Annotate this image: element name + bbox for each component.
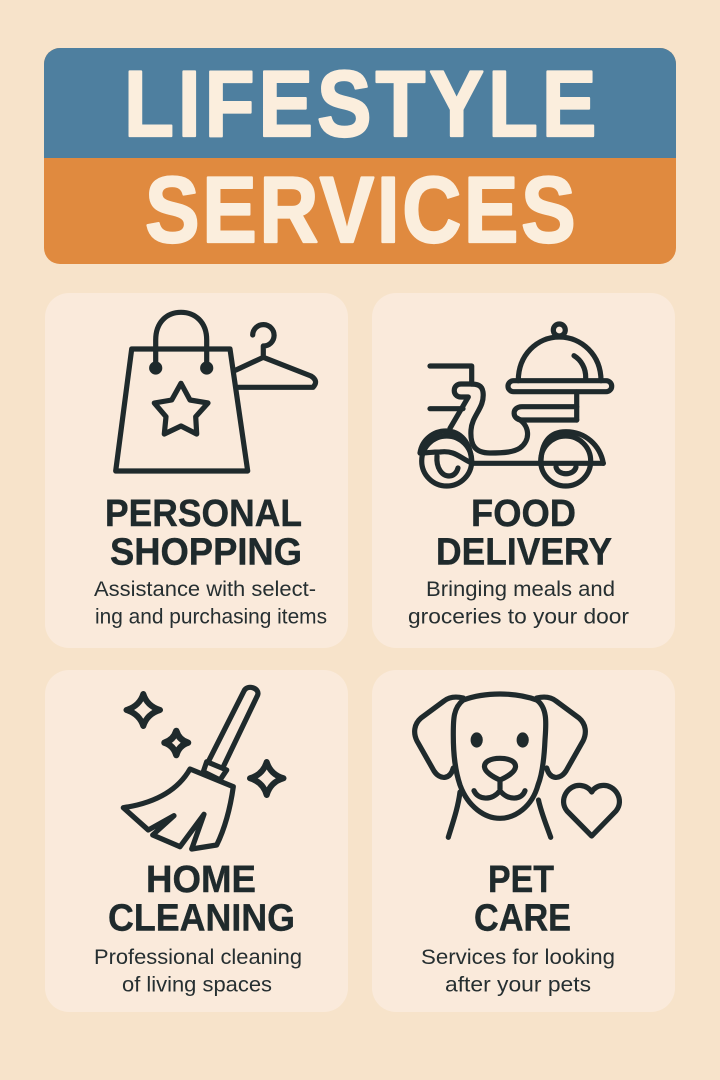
title banner [44,48,676,264]
icon: delivery scooter with cloche [420,324,612,486]
heading: food delivery: FOOD [471,493,576,535]
description: pet care: Services for looking [421,945,615,969]
description: home cleaning [94,945,302,996]
heading: pet care: PET [488,859,554,901]
description: food delivery: Bringing meals and [426,577,615,601]
panel: home cleaning [45,670,348,1012]
panel: food delivery [372,293,675,648]
description: personal shopping: ing and purchasing items [95,604,327,628]
description: home cleaning: of living spaces [122,972,272,996]
icon: broom with sparkles [123,687,284,849]
icon: dog with heart [415,694,619,837]
panel: pet care [372,670,675,1012]
description: pet care: after your pets [445,972,591,996]
heading: pet care [474,859,571,940]
title line: LIFESTYLE: LIFESTYLE [124,51,596,156]
heading: personal shopping: PERSONAL [105,493,302,535]
heading: pet care: CARE [474,898,571,940]
description: personal shopping: Assistance with select- [94,577,316,601]
heading: home cleaning: HOME [146,859,256,901]
description: pet care [421,945,615,996]
heading: home cleaning: CLEANING [108,898,295,940]
heading: home cleaning [108,859,295,940]
heading: personal shopping: SHOPPING [110,532,302,574]
description: food delivery: groceries to your door [408,604,629,628]
description: home cleaning: Professional cleaning [94,945,302,969]
description: personal shopping [94,577,327,628]
description: food delivery [408,577,629,628]
heading: personal shopping [105,493,302,574]
heading: food delivery [436,493,612,574]
title line: SERVICES: SERVICES [145,157,576,262]
panel: personal shopping [45,293,348,648]
heading: food delivery: DELIVERY [436,532,612,574]
icon: shopping bag with star and hanger [116,312,316,471]
